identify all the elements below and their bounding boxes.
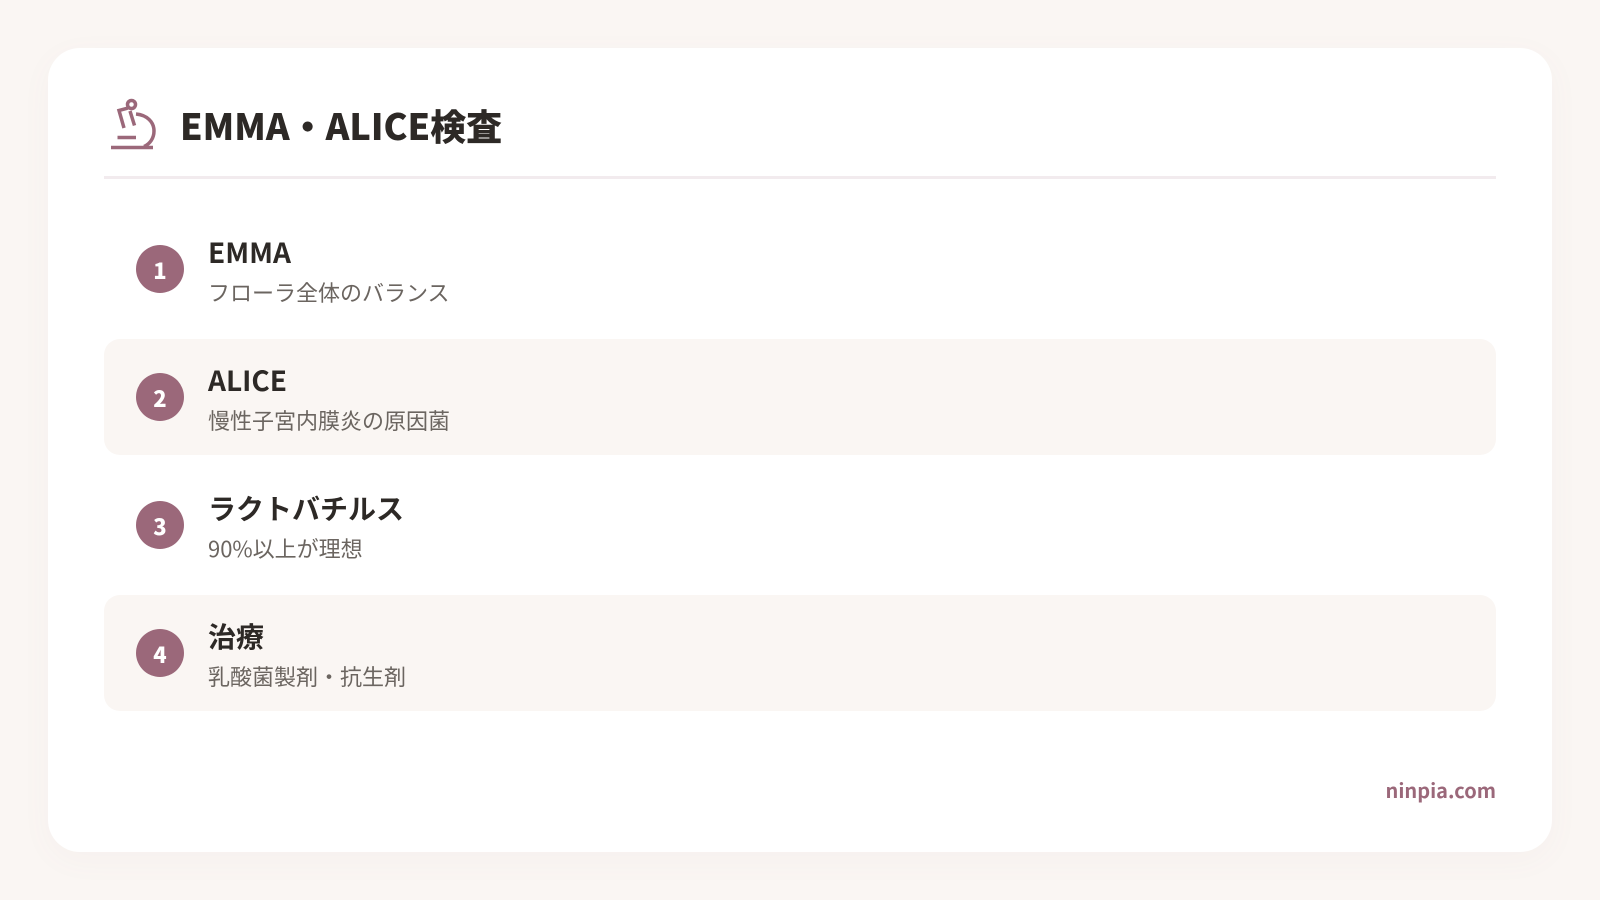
number badge 4 bbox=[136, 629, 184, 677]
number badge 1: 1 bbox=[153, 254, 167, 286]
item 2 description: 慢性子宮内膜炎の原因菌 bbox=[208, 404, 450, 436]
item 3 description: 90%以上が理想 bbox=[208, 532, 363, 564]
item 1 description: フローラ全体のバランス bbox=[208, 276, 450, 308]
panel: item 4 treatment bbox=[104, 595, 1496, 711]
title: EMMA・ALICE検査 bbox=[180, 99, 502, 151]
icon: microscope bbox=[111, 98, 156, 150]
item 4 description: 乳酸菌製剤・抗生剤 bbox=[208, 660, 406, 692]
number badge 2: 2 bbox=[153, 382, 167, 414]
number badge 2 bbox=[136, 373, 184, 421]
panel: item 2 ALICE bbox=[104, 339, 1496, 455]
item 3 heading: ラクトバチルス bbox=[208, 488, 404, 528]
item 2 heading: ALICE bbox=[208, 360, 287, 400]
footer source: ninpia.com bbox=[1386, 775, 1496, 804]
panel: item 1 EMMA bbox=[136, 232, 450, 308]
number badge 3: 3 bbox=[153, 510, 167, 542]
item 1 heading: EMMA bbox=[208, 232, 291, 272]
item 4 heading: 治療 bbox=[208, 616, 264, 656]
number badge 1 bbox=[136, 245, 184, 293]
number badge 4: 4 bbox=[153, 638, 167, 670]
panel: item 3 Lactobacillus bbox=[136, 488, 404, 564]
number badge 3 bbox=[136, 501, 184, 549]
